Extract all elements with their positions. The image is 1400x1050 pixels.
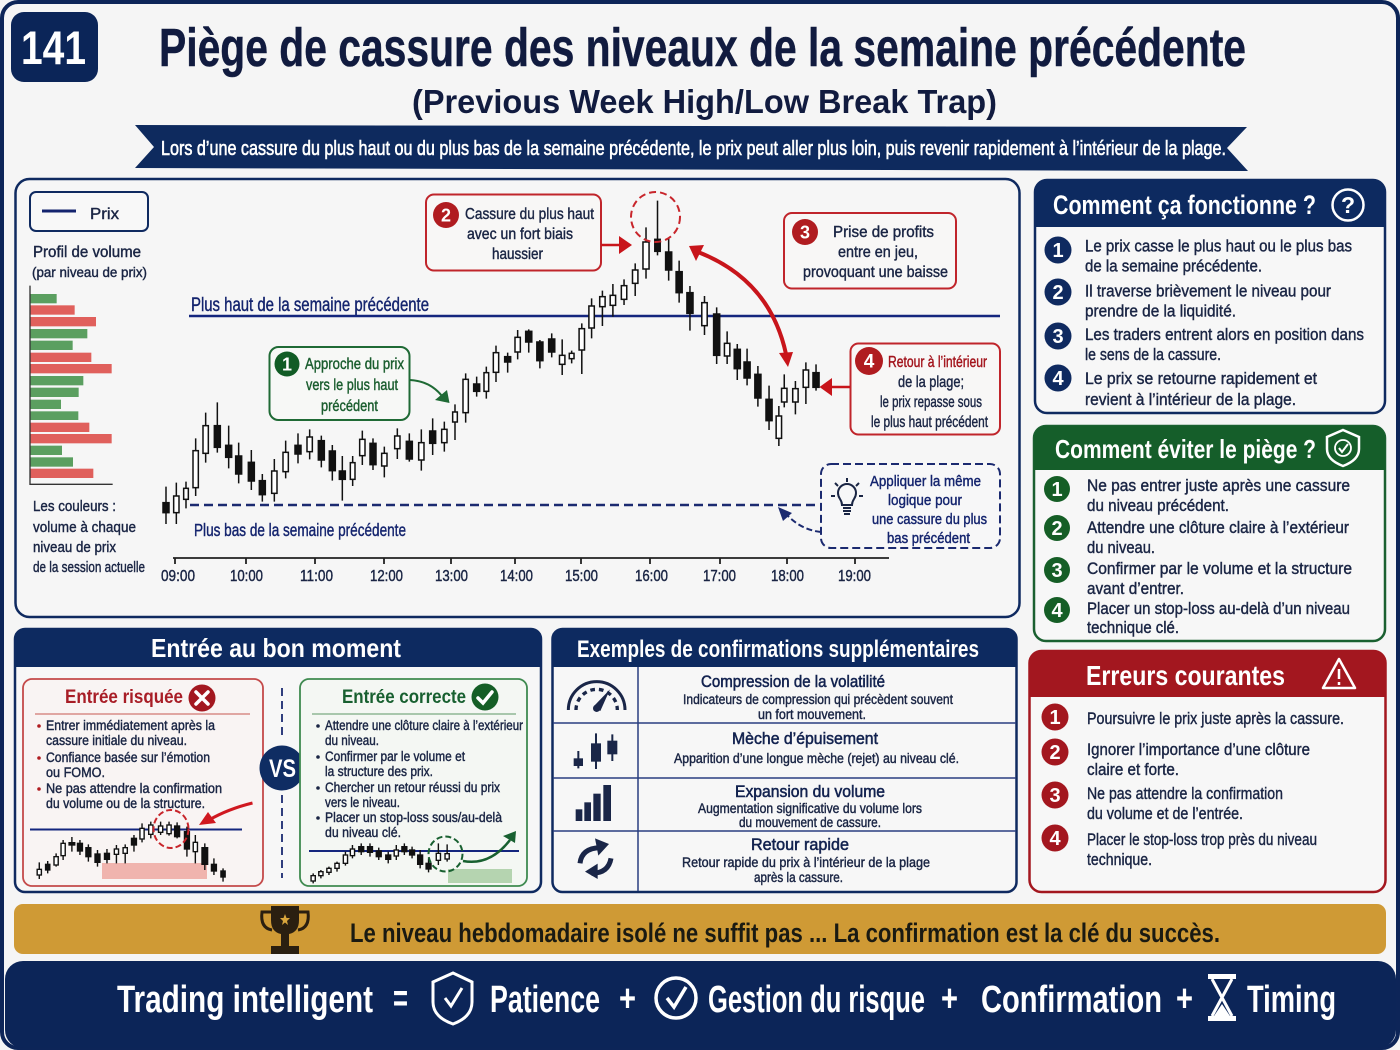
- panel: comment ça fonctionne: [1035, 180, 1385, 413]
- row: compression: un fort mouvement.: [758, 707, 866, 722]
- banner: trading formula: +: [1176, 978, 1193, 1020]
- icon: warning: [1323, 659, 1355, 688]
- list: Ignorer l’importance d’une clôture: [1087, 741, 1310, 759]
- steps: Attendre une clôture claire à l’extérieur: [1087, 519, 1349, 537]
- callout: same logic for low break: une cassure du plus: [872, 511, 987, 528]
- heading: profil de volume: [32, 244, 147, 280]
- time axis: 14:00: [500, 568, 533, 585]
- list: risky entry: Entrer immédiatement après la: [46, 718, 215, 733]
- time axis: [161, 558, 889, 585]
- subtitle: (Previous Week High/Low Break Trap): [412, 83, 997, 120]
- icon: trophy: [262, 906, 308, 954]
- time axis: 18:00: [771, 568, 804, 585]
- row: return: après la cassure.: [754, 870, 843, 885]
- banner: gold takeaway: [14, 904, 1386, 954]
- list: 1: [1049, 707, 1061, 729]
- list: risky entry: ou FOMO.: [46, 765, 105, 780]
- list: correct entry: du niveau.: [325, 733, 379, 748]
- list: technique.: [1087, 851, 1152, 869]
- callout 1: approach: précédent: [321, 398, 378, 415]
- heading: Erreurs courantes: [1086, 660, 1285, 691]
- callout 3: profit taking: 3: [800, 222, 810, 242]
- banner: trading formula: Trading intelligent: [117, 979, 373, 1021]
- list: 3: [1049, 785, 1061, 807]
- card: correct entry: [300, 679, 527, 886]
- callout: same logic for low break: Appliquer la même: [870, 473, 981, 490]
- steps: [1044, 236, 1364, 409]
- list: [1042, 704, 1344, 869]
- arrow: correct entry: [463, 831, 516, 862]
- steps: 1: [1051, 479, 1063, 501]
- icon: light bulb: [831, 478, 863, 514]
- row: return: [682, 835, 930, 885]
- time axis: 13:00: [435, 568, 468, 585]
- steps: Confirmer par le volume et la structure: [1087, 560, 1352, 578]
- list: correct entry: Placer un stop-loss sous/au-delà: [325, 810, 502, 825]
- row: return: Retour rapide du prix à l’intérieur de la plage: [682, 855, 930, 870]
- heading: Exemples de confirmations supplémentaires: [577, 636, 979, 663]
- time axis: 16:00: [635, 568, 668, 585]
- steps: Les traders entrent alors en position dans: [1085, 326, 1364, 344]
- steps: Il traverse brièvement le niveau pour: [1085, 282, 1331, 300]
- steps: 4: [1051, 600, 1063, 622]
- divider: versus: VS: [269, 755, 296, 783]
- heading: Comment éviter le piège ?: [1055, 434, 1316, 464]
- steps: de la semaine précédente.: [1085, 258, 1262, 276]
- steps: 2: [1052, 282, 1064, 304]
- banner: gold takeaway: Le niveau hebdomadaire isolé ne suffit pas ... La confirmation est la clé du succès.: [350, 918, 1220, 948]
- arrow: risky entry: [199, 803, 252, 825]
- mini chart: risky entry: [30, 803, 252, 882]
- list: correct entry: vers le niveau.: [325, 795, 400, 810]
- banner: trading formula: Gestion du risque: [708, 979, 925, 1021]
- text: colour note: niveau de prix: [33, 539, 116, 556]
- banner: trading formula: Patience: [490, 979, 600, 1021]
- list: correct entry: Attendre une clôture claire à l’extérieur: [325, 718, 523, 733]
- callout 4: return inside range: le prix repasse sous: [880, 394, 982, 411]
- banner: trading formula: +: [941, 978, 958, 1020]
- callout 3: profit taking: Prise de profits: [833, 224, 934, 241]
- heading: Entrée au bon moment: [151, 633, 401, 663]
- list: risky entry: Ne pas attendre la confirmation: [46, 781, 222, 796]
- list: correct entry: du niveau clé.: [325, 825, 401, 840]
- candlesticks: session start to 14:00: [163, 330, 520, 524]
- list: du volume et de l’entrée.: [1087, 805, 1243, 823]
- text: colour note: Les couleurs :: [33, 498, 116, 515]
- card: correct entry: Entrée correcte: [342, 686, 466, 708]
- steps: Placer un stop-loss au-delà d’un niveau: [1087, 600, 1350, 618]
- steps: avant d’entrer.: [1087, 580, 1184, 598]
- highlight circle: peak: [631, 192, 680, 242]
- legend: prix: [30, 192, 148, 231]
- candlesticks: 14:00 to session end: [526, 201, 819, 446]
- list: correct entry: la structure des prix.: [325, 764, 433, 779]
- heading: profil de volume: (par niveau de prix): [32, 264, 147, 280]
- steps: du niveau précédent.: [1087, 497, 1229, 515]
- mini chart: correct entry: [309, 831, 519, 883]
- row: compression: [683, 672, 953, 722]
- panel: exemples de confirmations: [552, 629, 1016, 892]
- icon: shield: [1327, 430, 1359, 466]
- callout 4: return inside range: Retour à l’intérieur: [888, 354, 988, 371]
- banner: trading formula: Confirmation: [981, 979, 1162, 1021]
- list: 4: [1049, 828, 1061, 850]
- steps: revient à l’intérieur de la plage.: [1085, 391, 1296, 409]
- icon: candles: [575, 733, 616, 769]
- time axis: 12:00: [370, 568, 403, 585]
- list: correct entry: Confirmer par le volume et: [325, 749, 465, 764]
- icon: circle check: [656, 978, 696, 1018]
- list: 2: [1049, 742, 1061, 764]
- callout: same logic for low break: bas précédent: [887, 530, 971, 547]
- line: previous week low: Plus bas de la semaine précédente: [194, 520, 406, 540]
- panel: comment éviter le piège: [1034, 426, 1385, 641]
- row: wick: [674, 729, 959, 766]
- callout 2: break: haussier: [492, 246, 544, 263]
- steps: 3: [1052, 326, 1064, 348]
- steps: 4: [1052, 368, 1064, 390]
- icon: check: [472, 684, 498, 710]
- callout: same logic for low break: [821, 464, 1000, 548]
- banner: trading formula: +: [619, 978, 636, 1020]
- callout 2: break: 2: [441, 206, 451, 226]
- icon: gauge: [568, 682, 625, 712]
- list: correct entry: Chercher un retour réussi du prix: [325, 780, 500, 795]
- callout 1: approach: [270, 347, 410, 420]
- list: correct entry: [316, 718, 523, 840]
- panel: price chart: [16, 179, 1020, 617]
- arrow: callout 4 to price: [820, 378, 850, 396]
- steps: 3: [1051, 560, 1063, 582]
- banner: trading formula: [5, 961, 1396, 1048]
- chart: volume profile bars: [30, 286, 113, 484]
- callout 4: return inside range: de la plage;: [898, 374, 964, 391]
- arrow: low break note to level: [778, 507, 821, 532]
- heading: Comment ça fonctionne ?: [1053, 190, 1316, 220]
- callout 4: return inside range: 4: [864, 352, 875, 372]
- ribbon: [135, 125, 1248, 171]
- callout 2: break: [426, 194, 601, 270]
- time axis: 11:00: [300, 568, 333, 585]
- steps: 1: [1052, 240, 1064, 262]
- arrow: callout 1 to price: [410, 380, 450, 403]
- row: compression: Compression de la volatilité: [701, 672, 885, 691]
- row: return: Retour rapide: [751, 835, 849, 854]
- banner: trading formula: =: [393, 978, 408, 1020]
- list: risky entry: du volume ou de la structure.: [46, 796, 205, 811]
- time axis: 17:00: [703, 568, 736, 585]
- icon: volume bars: [576, 785, 611, 821]
- list: risky entry: cassure initiale du niveau.: [46, 733, 187, 748]
- row: volume: Expansion du volume: [735, 782, 885, 801]
- banner: trading formula: Timing: [1247, 979, 1336, 1021]
- steps: du niveau.: [1087, 539, 1155, 557]
- callout 2: break: Cassure du plus haut: [465, 206, 594, 223]
- time axis: 15:00: [565, 568, 598, 585]
- icon: question: [1332, 190, 1364, 220]
- text: colour note: de la session actuelle: [33, 559, 145, 576]
- line: previous week high: Plus haut de la semaine précédente: [191, 295, 429, 316]
- callout 1: approach: 1: [282, 354, 292, 374]
- badge: number 141: [11, 12, 98, 82]
- callout 3: profit taking: provoquant une baisse: [803, 264, 948, 281]
- steps: Ne pas entrer juste après une cassure: [1087, 477, 1350, 495]
- row: wick: Mèche d’épuisement: [732, 729, 878, 748]
- callout: same logic for low break: logique pour: [888, 492, 962, 509]
- callout 3: profit taking: entre en jeu,: [838, 244, 918, 261]
- heading: profil de volume: Profil de volume: [33, 244, 141, 261]
- list: claire et forte.: [1087, 761, 1179, 779]
- steps: 2: [1051, 518, 1063, 540]
- time axis: 09:00: [161, 568, 195, 585]
- steps: Le prix se retourne rapidement et: [1085, 370, 1317, 388]
- row: compression: Indicateurs de compression qui précèdent souvent: [683, 692, 953, 707]
- row: wick: Apparition d’une longue mèche (rejet) au niveau clé.: [674, 751, 959, 766]
- icon: shield check: [433, 973, 472, 1024]
- steps: prendre de la liquidité.: [1085, 302, 1236, 320]
- list: risky entry: [37, 718, 222, 811]
- arrow: callout 2 to peak: [601, 236, 632, 254]
- steps: le sens de la cassure.: [1085, 346, 1221, 364]
- list: Poursuivre le prix juste après la cassure.: [1087, 710, 1344, 728]
- time axis: 10:00: [230, 568, 263, 585]
- text: colour note: [33, 498, 145, 576]
- arrow: drop from peak to return: [689, 245, 793, 367]
- callout 4: return inside range: le plus haut précédent: [871, 414, 988, 431]
- callout 2: break: avec un fort biais: [467, 226, 573, 243]
- time axis: 19:00: [838, 568, 871, 585]
- icon: cross: [188, 684, 216, 712]
- badge: number 141: 141: [21, 21, 86, 74]
- row: volume: [698, 782, 922, 830]
- steps: Le prix casse le plus haut ou le plus bas: [1085, 238, 1352, 256]
- text: colour note: volume à chaque: [33, 519, 136, 536]
- icon: question: ?: [1341, 192, 1355, 218]
- callout 3: profit taking: [784, 213, 956, 288]
- divider: versus: [260, 688, 304, 878]
- steps: [1044, 476, 1352, 637]
- steps: technique clé.: [1087, 619, 1179, 637]
- callout 4: return inside range: [850, 344, 1000, 434]
- panel: entrée au bon moment: [15, 629, 541, 892]
- callout 1: approach: Approche du prix: [305, 356, 404, 373]
- callout 1: approach: vers le plus haut: [306, 377, 398, 394]
- panel: erreurs courantes: [1030, 651, 1386, 892]
- card: risky entry: [23, 679, 263, 886]
- row: volume: Augmentation significative du volume lors: [698, 801, 922, 816]
- legend: prix: Prix: [90, 206, 119, 223]
- list: Ne pas attendre la confirmation: [1087, 785, 1283, 803]
- list: risky entry: Confiance basée sur l’émotion: [46, 750, 210, 765]
- row: volume: du mouvement de cassure.: [739, 815, 881, 830]
- card: risky entry: Entrée risquée: [65, 686, 183, 708]
- icon: refresh: [580, 838, 611, 879]
- list: Placer le stop-loss trop près du niveau: [1087, 831, 1317, 849]
- icon: hourglass: [1208, 974, 1236, 1021]
